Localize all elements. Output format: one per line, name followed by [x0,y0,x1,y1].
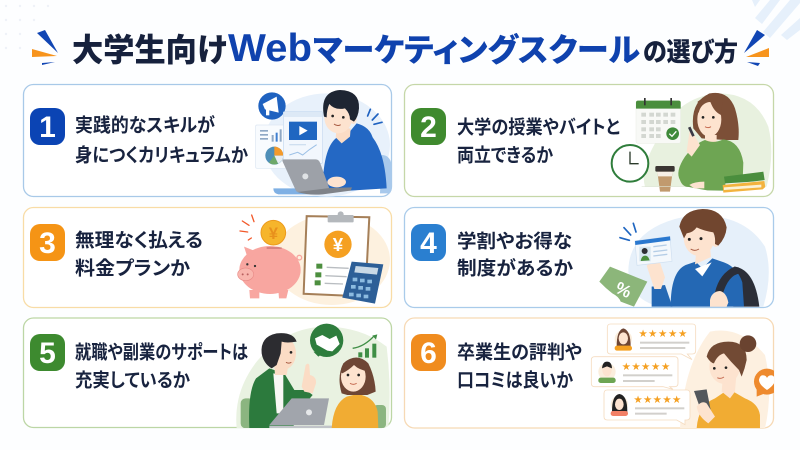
text: card 5 line 2: 充実しているか [75,370,190,392]
text: card 2 line 2: 両立できるか [457,144,553,166]
illustration: student with ID card: % [612,277,635,302]
text: card 3 line 2: 料金プランか [75,258,190,280]
text: card 1 line 2: 身につくカリキュラムか [75,144,248,166]
text: card 6 line 1: 卒業生の評判や [457,342,582,364]
number badge 5 [30,334,65,371]
icon: right spark [744,30,769,66]
illustration: review bubbles and woman with phone: ★ [648,329,657,339]
panel: card 4 student discount [404,208,774,308]
number badge 4 [411,224,446,261]
illustration: mentor and student [236,324,390,428]
illustration: review bubbles and woman with phone: ★ [653,395,661,405]
number badge 3: 3 [39,227,56,260]
illustration: review bubbles and woman with phone: ★ [651,362,660,372]
title text: marketing school: マーケティングスクール [313,32,640,68]
illustration: review bubbles and woman with phone: ★ [678,329,687,339]
illustration: review bubbles and woman with phone: ★ [643,395,652,405]
text: card 4 line 1: 学割やお得な [457,230,572,252]
text: card 3 line 1: 無理なく払える [75,230,203,252]
panel: card 5 career support [24,318,392,428]
illustration: student with laptop [256,90,392,197]
number badge 2: 2 [420,111,437,144]
text: card 1 line 1: 実践的なスキルが [75,114,215,136]
text: card 6 line 2: 口コミは良いか [457,370,573,392]
illustration: review bubbles and woman with phone: ★ [641,362,650,372]
number badge 1: 1 [39,111,56,144]
panel: card 2 balance with class and job [404,84,774,196]
illustration: review bubbles and woman with phone: ★ [668,329,677,339]
illustration: review bubbles and woman with phone: ★ [639,329,647,339]
illustration: review bubbles and woman with phone [591,324,780,428]
title text: how to choose: の選び方 [643,37,738,67]
illustration: review bubbles and woman with phone: ★ [672,395,681,405]
text: card 5 line 1: 就職や副業のサポートは [75,340,248,364]
illustration: piggy bank and clipboard [238,211,390,305]
number badge 6 [411,334,446,371]
title [32,27,769,70]
title text: Web: Web [228,27,312,70]
number badge 3 [30,224,65,261]
number badge 5: 5 [39,337,56,370]
number badge 2 [411,108,446,145]
panel: card 6 reviews [404,318,780,428]
illustration: student with calendar and clock [612,93,771,193]
illustration: piggy bank and clipboard: ¥ [269,224,279,243]
panel: card 3 price plan [24,208,392,308]
illustration: review bubbles and woman with phone: ★ [663,395,671,405]
illustration: piggy bank and clipboard: ¥ [333,234,344,255]
illustration: review bubbles and woman with phone: ★ [634,395,642,405]
text: card 4 line 2: 制度があるか [457,256,573,280]
illustration: review bubbles and woman with phone: ★ [658,329,667,339]
number badge 4: 4 [420,227,437,260]
panel: card 1 curriculum [24,84,392,197]
icon: left spark [32,30,58,65]
illustration: review bubbles and woman with phone: ★ [661,362,670,372]
text: card 2 line 1: 大学の授業やバイトと [457,116,620,138]
illustration: review bubbles and woman with phone: ★ [622,362,631,372]
title text: dark part: 大学生向け [72,32,227,68]
illustration: student with ID card [599,209,769,307]
number badge 1 [30,108,65,145]
number badge 6: 6 [420,337,437,370]
illustration: review bubbles and woman with phone: ★ [632,362,640,372]
